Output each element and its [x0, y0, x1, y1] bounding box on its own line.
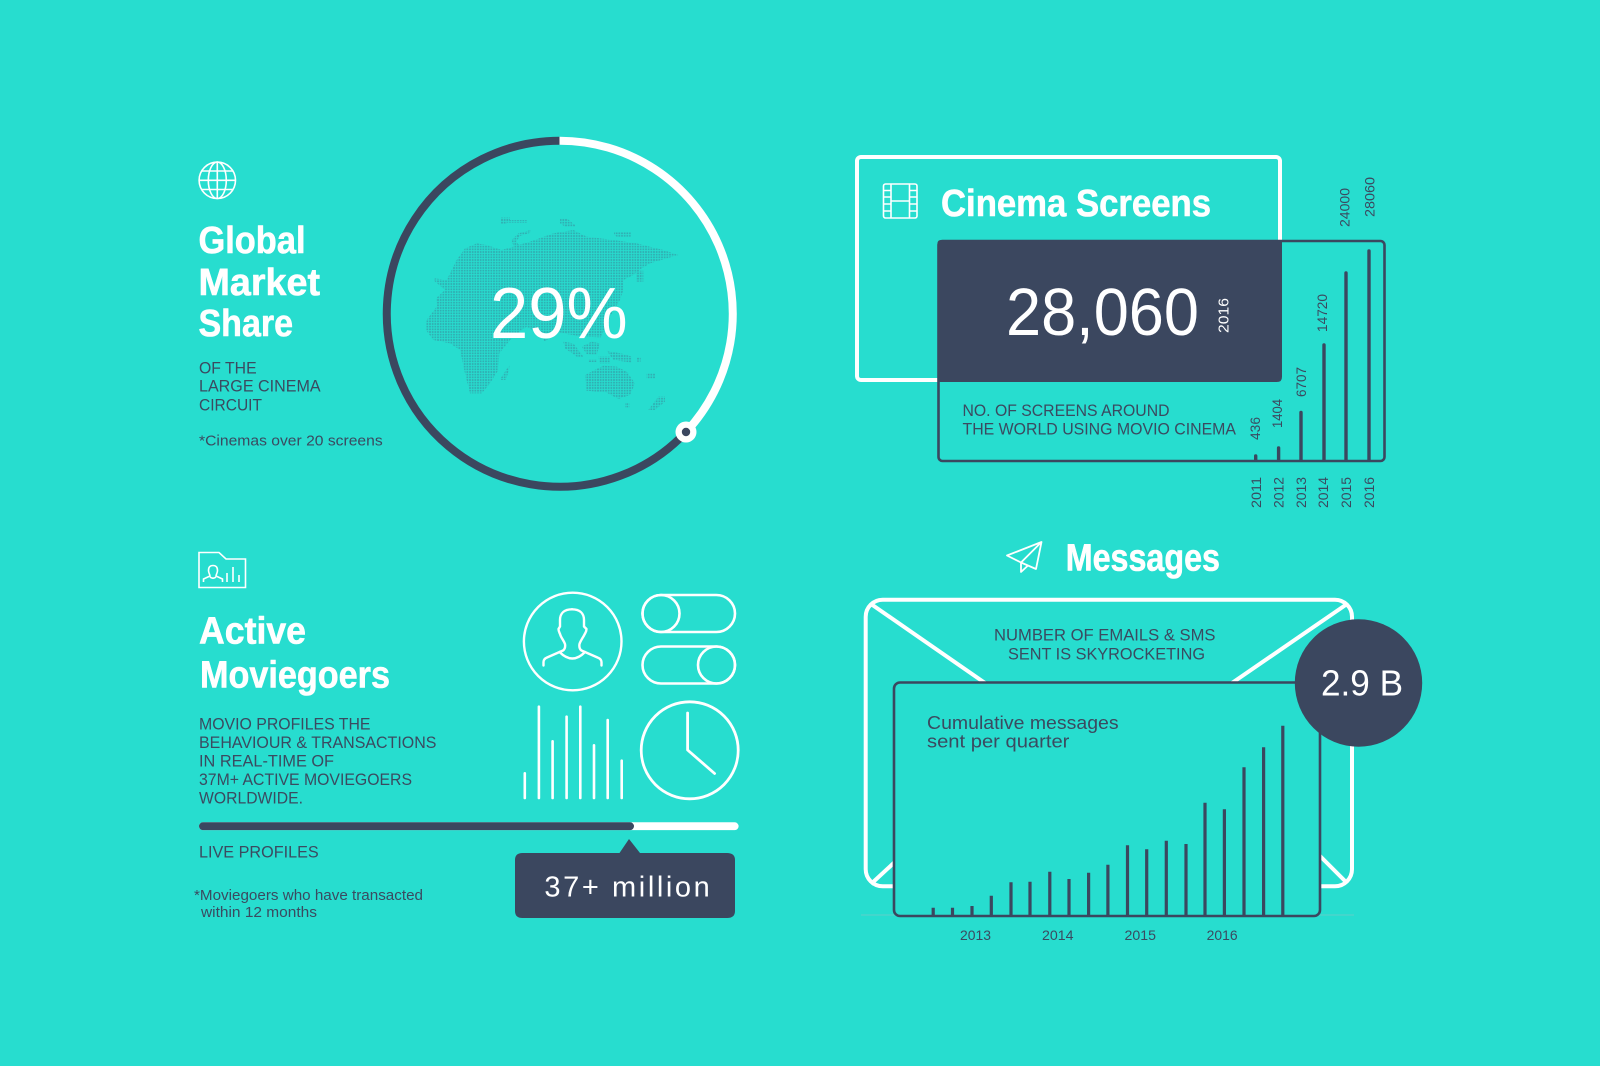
progress bar [199, 822, 739, 830]
text: number of emails and sms [994, 626, 1216, 663]
icon: toggle switch on right [642, 646, 735, 684]
icon: line bars [525, 707, 622, 798]
heading: Global Market Share: Market [198, 262, 320, 304]
chart caption: sent per quarter [927, 732, 1069, 752]
ring marker [676, 422, 696, 442]
bar year labels [1248, 477, 1377, 508]
description text: THE WORLD USING MOVIO CINEMA [962, 420, 1237, 439]
text: number of emails and sms: NUMBER OF EMAILS & SMS [994, 626, 1216, 645]
label: live profiles: LIVE PROFILES [199, 843, 319, 862]
icon: film strip [884, 184, 917, 218]
description text: 37M+ ACTIVE MOVIEGOERS [199, 770, 412, 789]
dotted world map [426, 218, 678, 410]
text: of the large cinema circuit: OF THE [199, 358, 257, 377]
icon: profile folder [199, 552, 246, 588]
bar year labels: 2012 [1271, 477, 1287, 508]
callout: 37+ million [515, 839, 735, 918]
chart year labels [960, 927, 1238, 943]
bar value labels: 1404 [1269, 399, 1285, 428]
heading: Active Moviegoers [199, 610, 390, 697]
bar year labels: 2013 [1293, 477, 1309, 508]
icon: avatar [524, 593, 622, 690]
dark value panel [938, 240, 1282, 382]
bar year labels: 2014 [1315, 477, 1331, 508]
bar value labels [1247, 177, 1378, 440]
icon: globe [199, 162, 236, 198]
badge: 2.9 B: 2.9 B [1321, 663, 1403, 704]
description text [199, 714, 436, 807]
description text [962, 401, 1237, 439]
heading: Global Market Share: Global [198, 220, 306, 262]
value: 29%: 29% [490, 274, 628, 354]
bar value labels: 14720 [1314, 294, 1330, 332]
progress ring: dark remainder [387, 141, 686, 487]
heading: Active Moviegoers: Active [199, 610, 306, 652]
chart year labels: 2013 [960, 927, 991, 943]
chart year labels: 2015 [1124, 927, 1156, 943]
heading: Messages: Messages [1066, 538, 1220, 580]
chart year labels: 2016 [1207, 927, 1238, 943]
bar year labels: 2016 [1361, 477, 1377, 508]
panel: global market share [198, 141, 733, 487]
footnote: moviegoers [194, 887, 423, 921]
heading: Global Market Share [198, 220, 320, 345]
description text: BEHAVIOUR & TRANSACTIONS [199, 733, 436, 752]
year label: 2016: 2016 [1216, 298, 1232, 333]
envelope outline [866, 600, 1352, 886]
bar year labels: 2015 [1338, 477, 1354, 508]
heading: Active Moviegoers: Moviegoers [200, 655, 390, 697]
heading: Global Market Share: Share [198, 303, 293, 345]
value: 28,060: 28,060 [1006, 275, 1199, 350]
panel: active moviegoers [194, 552, 739, 921]
panel: messages [861, 538, 1422, 943]
description text: IN REAL-TIME OF [199, 752, 334, 771]
description text: MOVIO PROFILES THE [199, 714, 370, 733]
bar value labels: 28060 [1362, 177, 1378, 217]
heading: Cinema Screens: Cinema Screens [941, 183, 1211, 225]
bar chart frame [938, 241, 1384, 461]
white title card [857, 157, 1280, 380]
footnote: cinemas over 20 screens: *Cinemas over 20 screens [199, 433, 383, 450]
bar value labels: 436 [1247, 417, 1263, 440]
icon: paper plane [1007, 542, 1042, 572]
bar year labels: 2011 [1248, 477, 1264, 508]
chart year labels: 2014 [1042, 927, 1074, 943]
bar chart: messages per quarter [933, 726, 1283, 916]
text: of the large cinema circuit [199, 358, 321, 414]
bar value labels: 24000 [1336, 188, 1352, 227]
icon: toggle switch on left [642, 595, 735, 632]
description text: WORLDWIDE. [199, 788, 303, 807]
progress ring: white arc [560, 141, 733, 432]
callout: 37+ million: 37+ million [544, 872, 710, 904]
badge: 2.9 B [1295, 619, 1422, 747]
text: of the large cinema circuit: LARGE CINEMA [199, 377, 321, 396]
bar value labels: 6707 [1293, 367, 1309, 397]
chart baseline [861, 914, 1354, 916]
text: of the large cinema circuit: CIRCUIT [199, 395, 262, 414]
text: number of emails and sms: SENT IS SKYROCKETING [1008, 644, 1205, 663]
chart caption [927, 713, 1119, 752]
chart card [894, 682, 1320, 916]
bar chart: screens by year [1256, 251, 1369, 460]
panel: cinema screens [857, 157, 1384, 508]
footnote: moviegoers: *Moviegoers who have transacted [194, 887, 423, 904]
chart caption: Cumulative messages [927, 713, 1119, 733]
description text: NO. OF SCREENS AROUND [962, 401, 1170, 420]
icon: clock [641, 702, 738, 799]
footnote: moviegoers: within 12 months [200, 904, 317, 921]
